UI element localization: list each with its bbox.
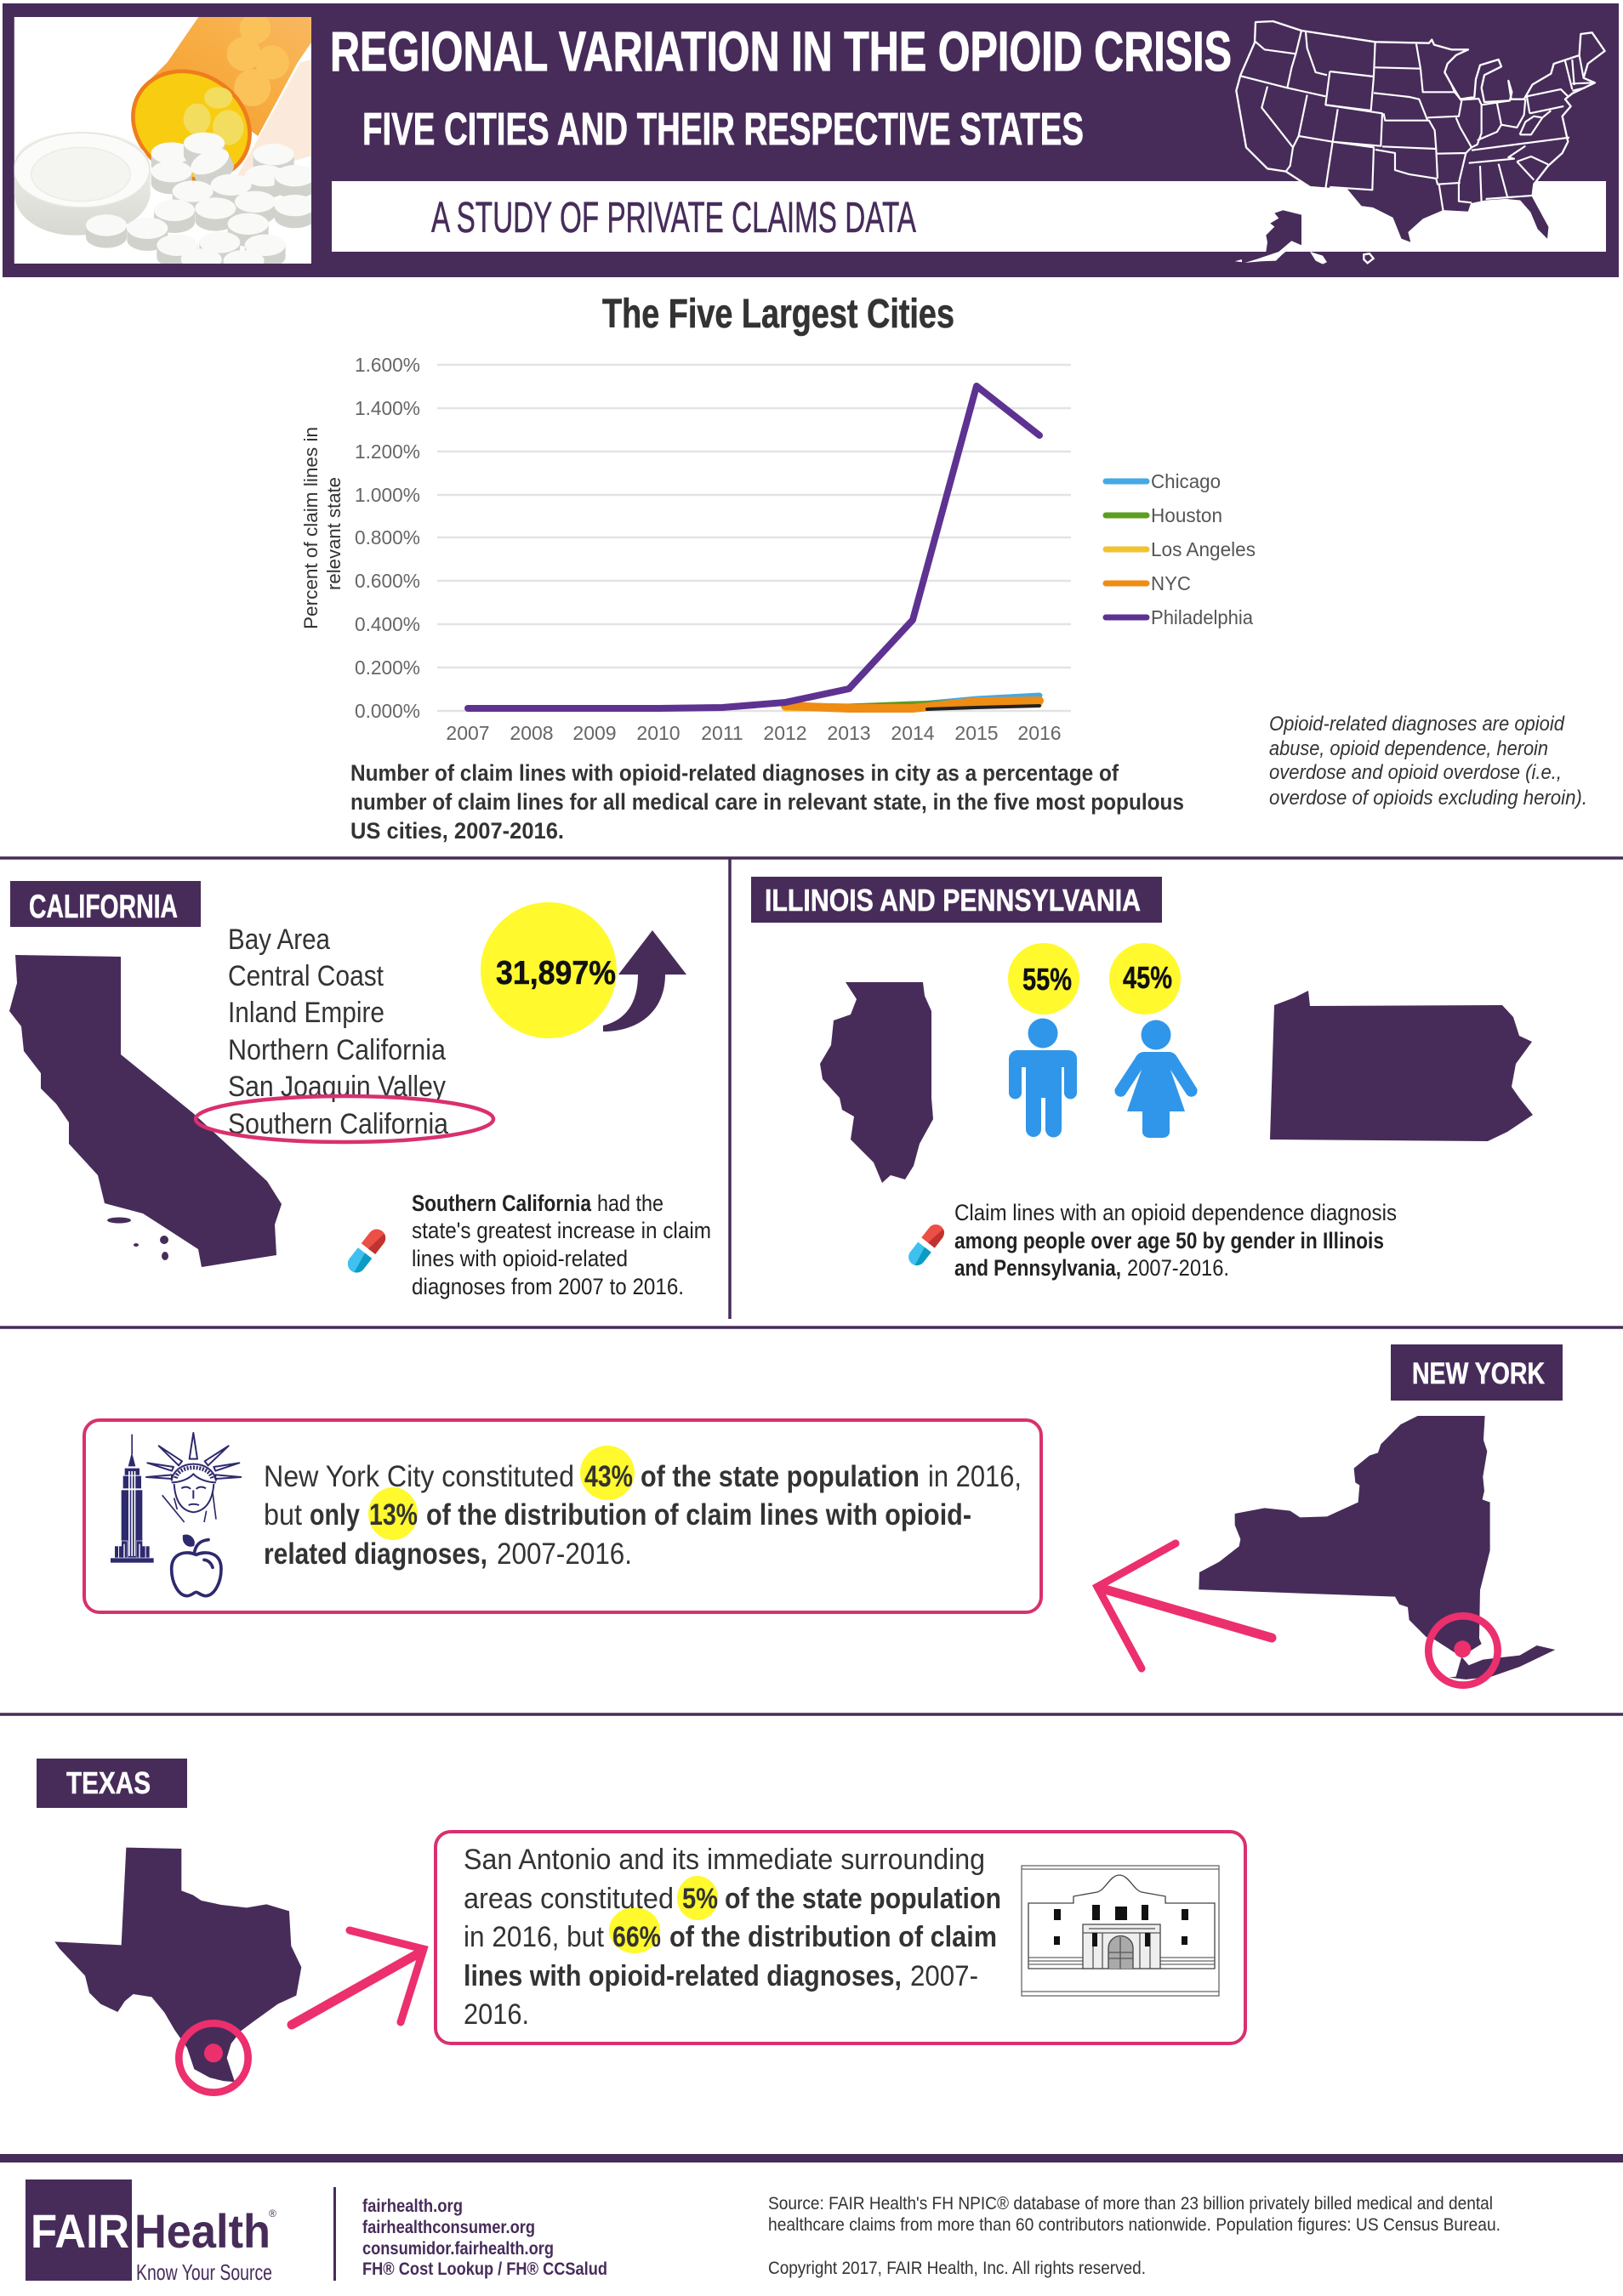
logo: FAIR Health: ® [269, 2208, 276, 2219]
map: California [9, 955, 282, 1267]
text: gender description [954, 1200, 1397, 1281]
definition note [1269, 713, 1587, 810]
x axis labels: 2013 [827, 722, 871, 744]
icon: capsule [345, 1225, 389, 1276]
heading: California: CALIFORNIA [29, 889, 178, 925]
y axis labels: 1.000% [355, 484, 420, 506]
stat: women 45% [1109, 943, 1198, 1138]
chart caption: number of claim lines for all medical care in relevant state, in the five most populous [350, 789, 1184, 815]
footer links: fairhealthconsumer.org [362, 2218, 535, 2237]
region list: Northern California [228, 1034, 446, 1066]
text: New York finding [264, 1460, 1022, 1571]
icon: the Alamo [1022, 1866, 1219, 1996]
icon: apple [172, 1536, 221, 1596]
y axis labels: 1.400% [355, 397, 420, 419]
footer links: fairhealth.org [362, 2197, 463, 2216]
heading: New York: NEW YORK [1412, 1357, 1545, 1390]
text: New York finding: related diagnoses, [264, 1537, 487, 1571]
text: Texas finding: 2016. [464, 1998, 529, 2031]
arrow: New York to callout [1097, 1543, 1272, 1668]
footer bar [0, 2154, 1623, 2162]
chart caption: Number of claim lines with opioid-related diagnoses in city as a percentage of [350, 760, 1119, 786]
legend [1106, 470, 1256, 628]
x axis labels: 2008 [510, 722, 554, 744]
text: New York finding: 2007-2016. [497, 1537, 632, 1571]
text: Texas finding: 5% [682, 1883, 718, 1915]
logo: FAIR Health: Know Your Source [136, 2259, 272, 2285]
logo: FAIR Health [26, 2179, 276, 2285]
legend: Los Angeles [1151, 538, 1256, 560]
panel: Texas [37, 1759, 1245, 2093]
text: Southern California finding: lines with opioid-related [412, 1246, 628, 1271]
text: New York finding: only [310, 1498, 360, 1532]
text: New York finding: 43% [584, 1460, 633, 1493]
y axis labels: 0.200% [355, 656, 420, 679]
legend: NYC [1151, 572, 1191, 594]
y axis title: Percent of claim lines in [300, 427, 322, 629]
stat: men 55% [1008, 943, 1079, 1138]
y axis labels: 0.600% [355, 570, 420, 592]
data lines [468, 386, 1039, 709]
stat: men 55%: 55% [1022, 962, 1072, 997]
text: Southern California finding: had the [597, 1191, 663, 1216]
source and copyright: healthcare claims from more than 60 contributors nationwide. Population figures: US Census Bureau. [768, 2215, 1501, 2235]
icon: US map [1235, 21, 1605, 264]
photo: spilled pill bottle [14, 17, 311, 264]
region list: Central Coast [228, 960, 384, 992]
text: Southern California finding: diagnoses from 2007 to 2016. [412, 1274, 684, 1299]
x axis labels: 2016 [1017, 722, 1062, 744]
legend: Philadelphia [1151, 606, 1253, 628]
panel: New York [84, 1344, 1563, 1685]
marker: New York City [1428, 1616, 1498, 1685]
header banner [3, 3, 1619, 283]
strip heading: A STUDY OF PRIVATE CLAIMS DATA [431, 193, 916, 242]
callout box: New York City [84, 1420, 1041, 1612]
region list: Southern California [228, 1108, 448, 1140]
text: Southern California finding: state's greatest increase in claim [412, 1218, 711, 1243]
source and copyright: Source: FAIR Health's FH NPIC® database of more than 23 billion privately billed medical and dental [768, 2194, 1493, 2214]
region list [228, 924, 448, 1140]
text: New York finding: of the distribution of claim lines with opioid- [426, 1498, 971, 1532]
stat: women 45%: 45% [1123, 960, 1172, 995]
icon: Alaska [1266, 210, 1301, 252]
chart caption [350, 760, 1184, 844]
heading: Texas [37, 1759, 187, 1808]
heading: Texas: TEXAS [66, 1765, 151, 1800]
chart title: The Five Largest Cities [602, 292, 954, 337]
x axis labels: 2007 [446, 722, 490, 744]
region list: Inland Empire [228, 997, 384, 1029]
text: gender description: Claim lines with an opioid dependence diagnosis [954, 1200, 1397, 1225]
map: New York [1199, 1416, 1555, 1685]
map: Pennsylvania [1270, 991, 1533, 1141]
icon: capsule [905, 1221, 948, 1269]
icon: Empire State Building [111, 1435, 154, 1563]
footer links: FH® Cost Lookup / FH® CCSalud [362, 2259, 607, 2279]
text: Texas finding: lines with opioid-related diagnoses, [464, 1960, 902, 1992]
y axis labels: 0.400% [355, 613, 420, 635]
heading: California [10, 881, 201, 927]
text: gender description: 2007-2016. [1127, 1255, 1229, 1281]
heading: Illinois and Pennsylvania [751, 877, 1162, 923]
text: Texas finding: 2007- [910, 1960, 978, 1992]
definition note: abuse, opioid dependence, heroin [1269, 737, 1548, 760]
subtitle: FIVE CITIES AND THEIR RESPECTIVE STATES [362, 104, 1084, 155]
text: Texas finding: of the distribution of claim [669, 1921, 997, 1953]
logo: FAIR Health: Health [134, 2204, 270, 2258]
x axis labels: 2009 [572, 722, 617, 744]
definition note: overdose and opioid overdose (i.e., [1269, 761, 1562, 784]
main title: REGIONAL VARIATION IN THE OPIOID CRISIS [330, 20, 1232, 82]
x axis labels: 2012 [763, 722, 807, 744]
line chart: five largest cities [300, 354, 1256, 744]
x axis labels: 2014 [891, 722, 935, 744]
white subtitle strip [332, 181, 1606, 252]
text: New York finding: New York City constituted [264, 1460, 574, 1493]
icon: man [1009, 1019, 1077, 1138]
text: Texas finding: 66% [612, 1921, 661, 1953]
highlight ring: Southern California [196, 1096, 493, 1142]
legend: Houston [1151, 504, 1222, 526]
text: New York finding: in 2016, [928, 1460, 1022, 1493]
text: Texas finding [464, 1844, 1001, 2031]
map: Texas [54, 1848, 301, 2093]
callout box: San Antonio [436, 1832, 1245, 2043]
icon: Hawaii [1364, 253, 1374, 263]
arrow: Texas to callout [292, 1930, 424, 2025]
text: Southern California finding [412, 1191, 711, 1299]
x axis labels [446, 722, 1062, 744]
arrow: upward increase [603, 930, 686, 1031]
text: Texas finding: of the state population [725, 1883, 1001, 1915]
icons: New York landmarks [111, 1433, 241, 1596]
text: gender description: among people over age 50 by gender in Illinois [954, 1228, 1384, 1253]
logo: FAIR Health: FAIR [31, 2204, 129, 2258]
definition note: overdose of opioids excluding heroin). [1269, 787, 1587, 810]
y axis labels: 1.600% [355, 354, 420, 376]
footer links [362, 2197, 607, 2279]
chart caption: US cities, 2007-2016. [350, 818, 564, 844]
region list: Bay Area [228, 924, 330, 956]
callout: 31,897%: 31,897% [496, 955, 616, 992]
heading: New York [1391, 1344, 1563, 1401]
text: gender description: and Pennsylvania, [954, 1255, 1121, 1281]
y axis labels [355, 354, 420, 722]
source and copyright [768, 2194, 1501, 2278]
marker: San Antonio [179, 2023, 248, 2093]
map: Illinois [820, 982, 933, 1183]
legend: Chicago [1151, 470, 1221, 492]
panel: Illinois and Pennsylvania [751, 877, 1533, 1281]
panel: California [9, 881, 711, 1299]
text: Texas finding: in 2016, but [464, 1921, 605, 1953]
text: New York finding: of the state population [641, 1460, 920, 1493]
text: Texas finding: San Antonio and its immediate surrounding [464, 1844, 985, 1876]
definition note: Opioid-related diagnoses are opioid [1269, 713, 1565, 736]
y axis title: relevant state [323, 477, 345, 590]
icon: Statue of Liberty [146, 1433, 241, 1522]
heading: Illinois and Pennsylvania: ILLINOIS AND PENNSYLVANIA [765, 883, 1141, 918]
footer links: consumidor.fairhealth.org [362, 2239, 554, 2259]
source and copyright: Copyright 2017, FAIR Health, Inc. All rights reserved. [768, 2259, 1146, 2278]
y axis title [300, 427, 345, 629]
text: Texas finding: areas constituted [464, 1883, 674, 1915]
x axis labels: 2010 [636, 722, 681, 744]
callout: 31,897% [481, 902, 617, 1038]
y axis labels: 0.000% [355, 700, 420, 722]
y axis labels: 1.200% [355, 440, 420, 463]
icon: woman [1114, 1020, 1198, 1138]
x axis labels: 2015 [954, 722, 999, 744]
y axis labels: 0.800% [355, 526, 420, 548]
x axis labels: 2011 [701, 722, 743, 744]
region list: San Joaquin Valley [228, 1071, 446, 1103]
text: New York finding: 13% [369, 1498, 418, 1532]
text: New York finding: but [264, 1498, 302, 1532]
text: Southern California finding: Southern California [412, 1191, 592, 1216]
